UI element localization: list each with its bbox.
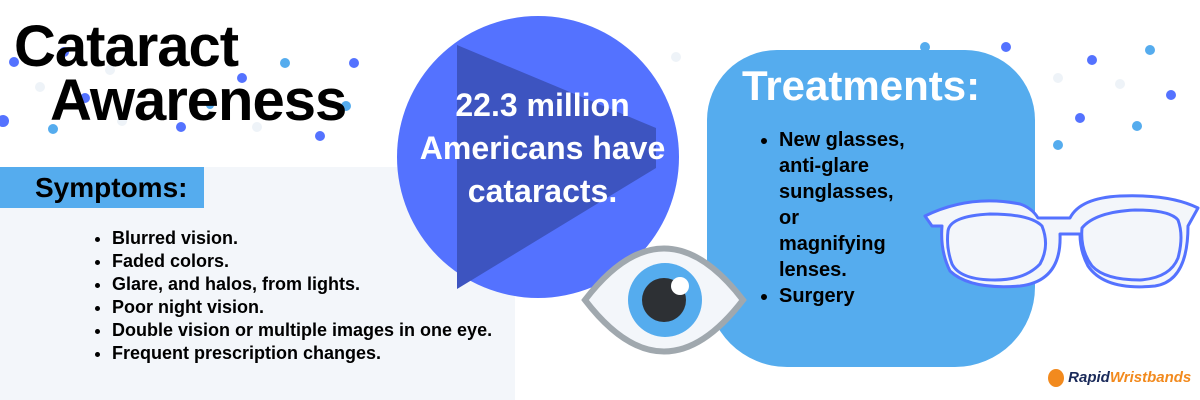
symptoms list: Glare, and halos, from lights. [112, 274, 360, 294]
symptoms list: Double vision or multiple images in one eye. [112, 320, 492, 340]
treatments list: New glasses, anti-glare sunglasses, or magnifying lenses. [779, 129, 905, 281]
statistic circle [397, 16, 679, 298]
statistic text: 22.3 million [455, 87, 630, 123]
symptoms list [95, 228, 492, 363]
icon: eye [581, 246, 747, 354]
symptoms heading [0, 167, 204, 208]
symptoms heading: Symptoms: [35, 172, 187, 203]
title: Cataract [14, 14, 238, 79]
statistic text: cataracts. [468, 173, 617, 209]
symptoms list: Faded colors. [112, 251, 229, 271]
title [14, 14, 346, 133]
panel: treatments [707, 50, 1035, 367]
symptoms list: Blurred vision. [112, 228, 238, 248]
symptoms list: Poor night vision. [112, 297, 264, 317]
treatments heading: Treatments: [742, 62, 980, 109]
panel: symptoms [0, 167, 515, 400]
logo: RapidWristbands [1068, 369, 1191, 386]
title: Awareness [50, 68, 346, 133]
statistic text [420, 87, 665, 209]
statistic text: Americans have [420, 130, 665, 166]
icon: glasses [924, 194, 1200, 288]
symptoms list: Frequent prescription changes. [112, 343, 381, 363]
treatments list: Surgery [779, 285, 855, 307]
